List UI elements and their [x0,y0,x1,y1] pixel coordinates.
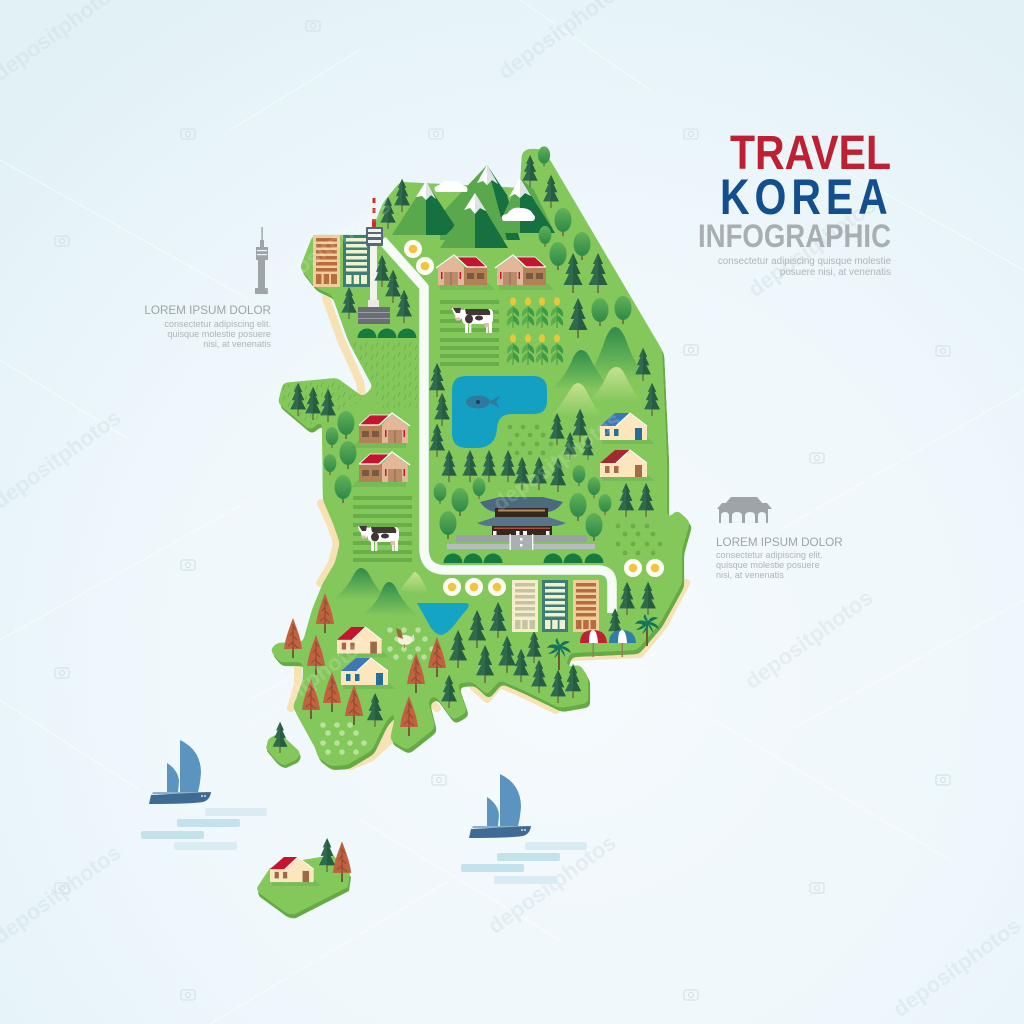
title: infographic: INFOGRAPHIC [698,218,891,254]
cream building [512,580,538,632]
watermark over map: depositphotos [258,193,396,302]
road [382,240,612,613]
sand beaches [291,298,686,771]
bushes north [358,328,416,338]
title: travel: TRAVEL [730,127,891,180]
dots patches [508,425,662,555]
orange building [313,235,340,287]
palace [447,497,595,550]
title [698,127,893,278]
watermark: depositphotos [743,193,881,302]
orange building south [573,580,599,632]
cow north [452,308,493,333]
hills southwest [333,568,428,616]
icon: seoul tower [255,227,268,294]
watermark over map [236,193,626,739]
flowers [404,240,664,596]
right callout text: nisi, at venenatis [716,570,784,580]
grass hatch fields [283,340,417,425]
boat 1 [149,740,211,804]
seoul tower [358,193,390,324]
houses north [436,255,554,290]
right callout text: quisque molestie posuere [716,560,820,570]
buildings south [512,580,599,632]
pond south [417,603,469,635]
watermark: depositphotos [740,585,878,694]
title description: posuere nisi, at venenatis [780,267,891,278]
small island west [266,722,301,768]
striped field north [440,300,499,366]
title description: consectetur adipiscing quisque molestie [718,256,892,267]
watermark: depositphotos [888,913,1024,1022]
buildings north [313,193,390,324]
striped field west [353,496,412,562]
round trees [324,146,632,541]
red pines [284,593,446,736]
icon: palace [717,497,772,523]
left callout text: nisi, at venenatis [203,339,271,349]
left callout text: quisque molestie posuere [167,329,271,339]
left callout text: consectetur adipiscing elit. [164,319,271,329]
waves 2 [461,842,587,884]
fish [466,396,500,408]
land edge [272,153,692,770]
houses southwest [337,627,396,689]
lake [452,376,547,448]
houses east [600,413,655,481]
right callout text: consectetur adipiscing elit. [716,550,823,560]
watermark over map: depositphotos [488,407,626,516]
right callout heading: LOREM IPSUM DOLOR [716,536,843,549]
corn field [507,297,563,365]
clouds [435,181,535,221]
boat 2 [469,774,531,838]
umbrellas [580,630,636,657]
palm trees [547,614,659,670]
land surface [270,149,690,766]
map of korea [236,146,692,771]
teal building [343,235,370,287]
hills east [552,327,645,417]
right callout [716,497,843,580]
houses west [351,413,410,487]
title: korea: KOREA [720,169,893,225]
bushes south of palace [444,554,604,563]
watermark: depositphotos [483,830,621,939]
cow west [358,526,399,551]
waves 1 [141,808,267,850]
mountains [392,165,555,248]
chicken [396,628,414,648]
watermark over map: depositphotos [236,630,374,739]
jeju island [257,838,351,918]
left callout heading: LOREM IPSUM DOLOR [144,304,271,317]
left callout [144,227,271,349]
teal building south [542,580,568,632]
pine trees [290,155,660,727]
